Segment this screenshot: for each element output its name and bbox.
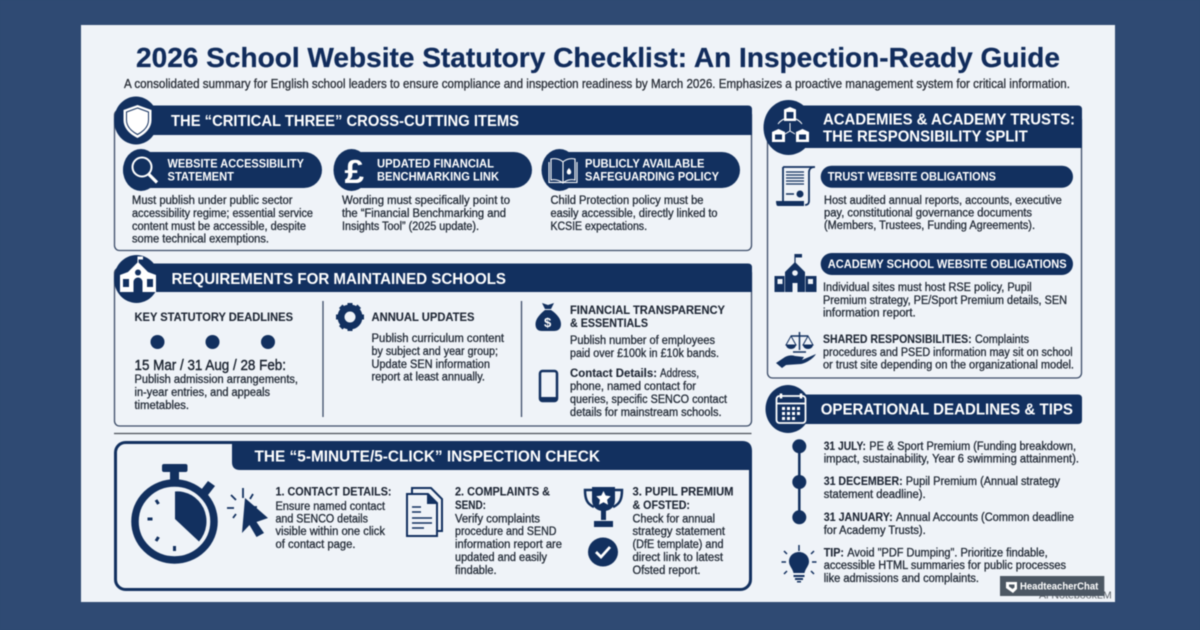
item: safeguarding policy (542, 149, 740, 233)
item: financial benchmarking link: BENCHMARKING LINK (377, 170, 499, 184)
panel header: inspection check (232, 441, 752, 470)
icon: pound sign: £ (344, 153, 365, 190)
item: financial benchmarking link: Insights Tool” (2025 update). (342, 221, 479, 233)
deadline: 31 December: 31 DECEMBER: (824, 476, 903, 488)
heading: academies: THE RESPONSIBILITY SPLIT (823, 129, 1028, 146)
check 3: pupil premium and ofsted: direct link to latest (632, 552, 724, 564)
text: shared responsibilities: procedures and PSED information may sit on school (823, 347, 1073, 359)
check 2: complaints and send (407, 487, 562, 577)
panel: operational deadlines (766, 385, 1082, 585)
watermark: NotebookLM: Ai NotebookLM (1039, 590, 1112, 602)
check 3: pupil premium and ofsted: & OFSTED: (632, 500, 690, 512)
panel header: operational deadlines (790, 394, 1082, 424)
item: website accessibility statement: STATEMENT (168, 170, 235, 184)
infographic card (81, 25, 1115, 602)
icon: school building (114, 255, 159, 303)
subheading: trust website obligations (821, 166, 1073, 188)
item: website accessibility statement: content must be accessible, despite (132, 221, 306, 233)
panel header: academies (790, 106, 1082, 148)
column: financial transparency: phone, named contact for (570, 381, 696, 393)
item: safeguarding policy: KCSIE expectations. (550, 221, 647, 233)
panel: maintained schools (114, 255, 752, 426)
panel header: critical three (130, 106, 752, 135)
check 3: pupil premium and ofsted: Ofsted report. (632, 565, 700, 577)
check 2: complaints and send: updated and easily (455, 552, 547, 564)
check 2: complaints and send: information report are (455, 539, 562, 551)
check 1: contact details: visible within one click (276, 526, 385, 538)
icon: money bag (536, 303, 561, 331)
check 3: pupil premium and ofsted: (DfE template) and (632, 539, 724, 551)
timeline dots (150, 335, 275, 349)
tip: TIP: (824, 548, 844, 560)
badge: HeadteacherChat (1000, 576, 1104, 596)
item: website accessibility statement (123, 149, 322, 246)
item: website accessibility statement: accessibility regime; essential service (132, 208, 313, 220)
column: financial transparency: paid over £100k in £10k bands. (570, 348, 719, 360)
subtitle: A consolidated summary for English school leaders to ensure compliance and inspection readiness by March 2026. Emphasizes a proactive management system for critical information. (124, 77, 1070, 91)
check 1: contact details: 1. CONTACT DETAILS: (276, 487, 392, 499)
deadline: 31 January: 31 JANUARY: (824, 512, 893, 524)
check 2: complaints and send: procedure and SEND (455, 526, 556, 538)
check 1: contact details: Ensure named contact (276, 501, 386, 513)
column: financial transparency: queries, specific SENCO contact (570, 394, 728, 406)
text: shared responsibilities: Complaints (975, 334, 1029, 346)
tip: accessible HTML summaries for public processes (824, 560, 1066, 572)
tip: like admissions and complaints. (824, 573, 979, 585)
item: safeguarding policy: PUBLICLY AVAILABLE (585, 157, 704, 171)
icon: scales in hand (776, 332, 816, 368)
text: academy school obligations: Premium strategy, PE/Sport Premium details, SEN (823, 295, 1067, 307)
icon: light bulb (782, 545, 816, 582)
column: annual updates: Publish curriculum content (372, 333, 505, 345)
check 1: contact details (227, 487, 392, 551)
panel header: maintained schools (130, 264, 752, 292)
item: safeguarding policy: easily accessible, directly linked to (550, 208, 718, 220)
column: annual updates: by subject and year group; (372, 346, 498, 358)
title: 2026 School Website Statutory Checklist: An Inspection-Ready Guide (136, 42, 1060, 73)
text: trust obligations: pay, constitutional governance documents (824, 208, 1032, 220)
icon: scroll document (776, 167, 815, 206)
column: annual updates: Update SEN information (372, 359, 490, 371)
check 2: complaints and send: Verify complaints (455, 514, 540, 526)
timeline (792, 439, 806, 524)
tip: Avoid "PDF Dumping". Prioritize findable, (847, 548, 1048, 560)
icon: stopwatch (135, 464, 215, 560)
column: annual updates: report at least annually. (372, 372, 485, 384)
text: trust obligations: Host audited annual reports, accounts, executive (824, 195, 1062, 207)
deadline: 31 December (824, 476, 1060, 501)
icon: check badge (588, 538, 618, 566)
icon: phone (540, 371, 557, 401)
icon: academy trust network (764, 100, 814, 155)
column: annual updates (336, 303, 505, 384)
deadline: 31 January: Annual Accounts (Common deadline (896, 512, 1074, 524)
heading: inspection check: THE “5-MINUTE/5-CLICK” INSPECTION CHECK (254, 448, 601, 466)
item: website accessibility statement: some technical exemptions. (132, 234, 269, 246)
column: financial transparency: FINANCIAL TRANSPARENCY (570, 305, 725, 317)
check 3: pupil premium and ofsted: 3. PUPIL PREMIUM (632, 487, 734, 499)
check 1: contact details: of contact page. (276, 539, 356, 551)
badge: HeadteacherChat: HeadteacherChat (1020, 580, 1099, 592)
item: safeguarding policy: SAFEGUARDING POLICY (585, 170, 719, 184)
icon: money bag: $ (544, 315, 552, 330)
panel: inspection check (116, 441, 752, 590)
icon: open book (549, 159, 577, 183)
text: trust obligations: (Members, Trustees, Funding Agreements). (824, 220, 1035, 232)
text: academy school obligations: Individual sites must host RSE policy, Pupil (823, 282, 1032, 294)
column: key statutory deadlines: timetables. (134, 400, 189, 412)
text: shared responsibilities (823, 334, 1074, 372)
column: annual updates: ANNUAL UPDATES (372, 312, 475, 324)
text: trust obligations (824, 195, 1062, 232)
icon: trophy (585, 487, 622, 527)
item: financial benchmarking link: UPDATED FINANCIAL (377, 157, 494, 171)
heading: academies: ACADEMIES & ACADEMY TRUSTS: (823, 111, 1075, 128)
check 3: pupil premium and ofsted (585, 487, 734, 577)
heading: academies (823, 111, 1075, 146)
heading: critical three: THE “CRITICAL THREE” CROSS-CUTTING ITEMS (171, 113, 519, 130)
deadline: 31 July: impact, sustainability, Year 6 swimming attainment). (824, 454, 1079, 466)
heading: maintained schools: REQUIREMENTS FOR MAINTAINED SCHOOLS (172, 271, 506, 288)
subheading: academy school obligations: ACADEMY SCHOOL WEBSITE OBLIGATIONS (828, 257, 1067, 271)
column: financial transparency: & ESSENTIALS (570, 318, 648, 330)
text: academy school obligations: information report. (823, 308, 916, 320)
panel: critical three (114, 96, 752, 250)
deadline: 31 January (824, 512, 1074, 537)
column: financial transparency: Address, (660, 368, 699, 380)
column: financial transparency (536, 303, 728, 419)
icon: academy school (774, 254, 816, 292)
icon: click cursor (227, 488, 268, 537)
check 2: complaints and send: findable. (455, 565, 496, 577)
deadline: 31 July: 31 JULY: (824, 441, 866, 453)
item: financial benchmarking link (334, 149, 532, 233)
text: shared responsibilities: SHARED RESPONSIBILITIES: (823, 334, 972, 346)
deadline: 31 January: for Academy Trusts). (824, 525, 926, 537)
deadline: 31 December: statement deadline). (824, 489, 926, 501)
check 2: complaints and send: SEND: (455, 500, 486, 512)
item: financial benchmarking link: the “Financial Benchmarking and (342, 208, 506, 220)
item: website accessibility statement: WEBSITE ACCESSIBILITY (168, 157, 304, 171)
check 2: complaints and send: 2. COMPLAINTS & (455, 487, 550, 499)
column: financial transparency: details for mainstream schools. (570, 407, 722, 419)
item: safeguarding policy: Child Protection policy must be (550, 195, 704, 207)
column: key statutory deadlines: KEY STATUTORY DEADLINES (134, 312, 293, 324)
icon: documents (407, 488, 442, 536)
deadline: 31 July (824, 441, 1079, 466)
column: financial transparency: Contact Details: (570, 368, 657, 380)
icon: gear (336, 303, 364, 331)
column: key statutory deadlines (134, 312, 298, 412)
column: key statutory deadlines: 15 Mar / 31 Aug / 28 Feb: (134, 358, 286, 374)
icon: magnifier (132, 158, 157, 182)
tip (824, 548, 1066, 585)
panel: academies (764, 100, 1082, 378)
item: financial benchmarking link: Wording must specifically point to (342, 195, 510, 207)
deadline: 31 July: PE & Sport Premium (Funding breakdown, (869, 441, 1076, 453)
item: website accessibility statement: Must publish under public sector (132, 195, 293, 207)
column: key statutory deadlines: Publish admission arrangements, (134, 374, 298, 386)
subheading: academy school obligations (821, 253, 1073, 275)
subheading: trust website obligations: TRUST WEBSITE OBLIGATIONS (828, 170, 996, 184)
text: shared responsibilities: or trust site depending on the organizational model. (823, 360, 1074, 372)
icon: calendar (766, 385, 810, 433)
heading: operational deadlines: OPERATIONAL DEADLINES & TIPS (821, 402, 1073, 418)
text: academy school obligations (823, 282, 1067, 320)
icon: shield (114, 96, 158, 144)
column: financial transparency: Publish number of employees (570, 335, 715, 347)
check 3: pupil premium and ofsted: strategy statement (632, 526, 726, 538)
check 3: pupil premium and ofsted: Check for annual (632, 514, 715, 526)
deadline: 31 December: Pupil Premium (Annual strategy (906, 476, 1060, 488)
column: key statutory deadlines: in-year entries, and appeals (134, 387, 270, 399)
check 1: contact details: and SENCO details (276, 514, 368, 526)
